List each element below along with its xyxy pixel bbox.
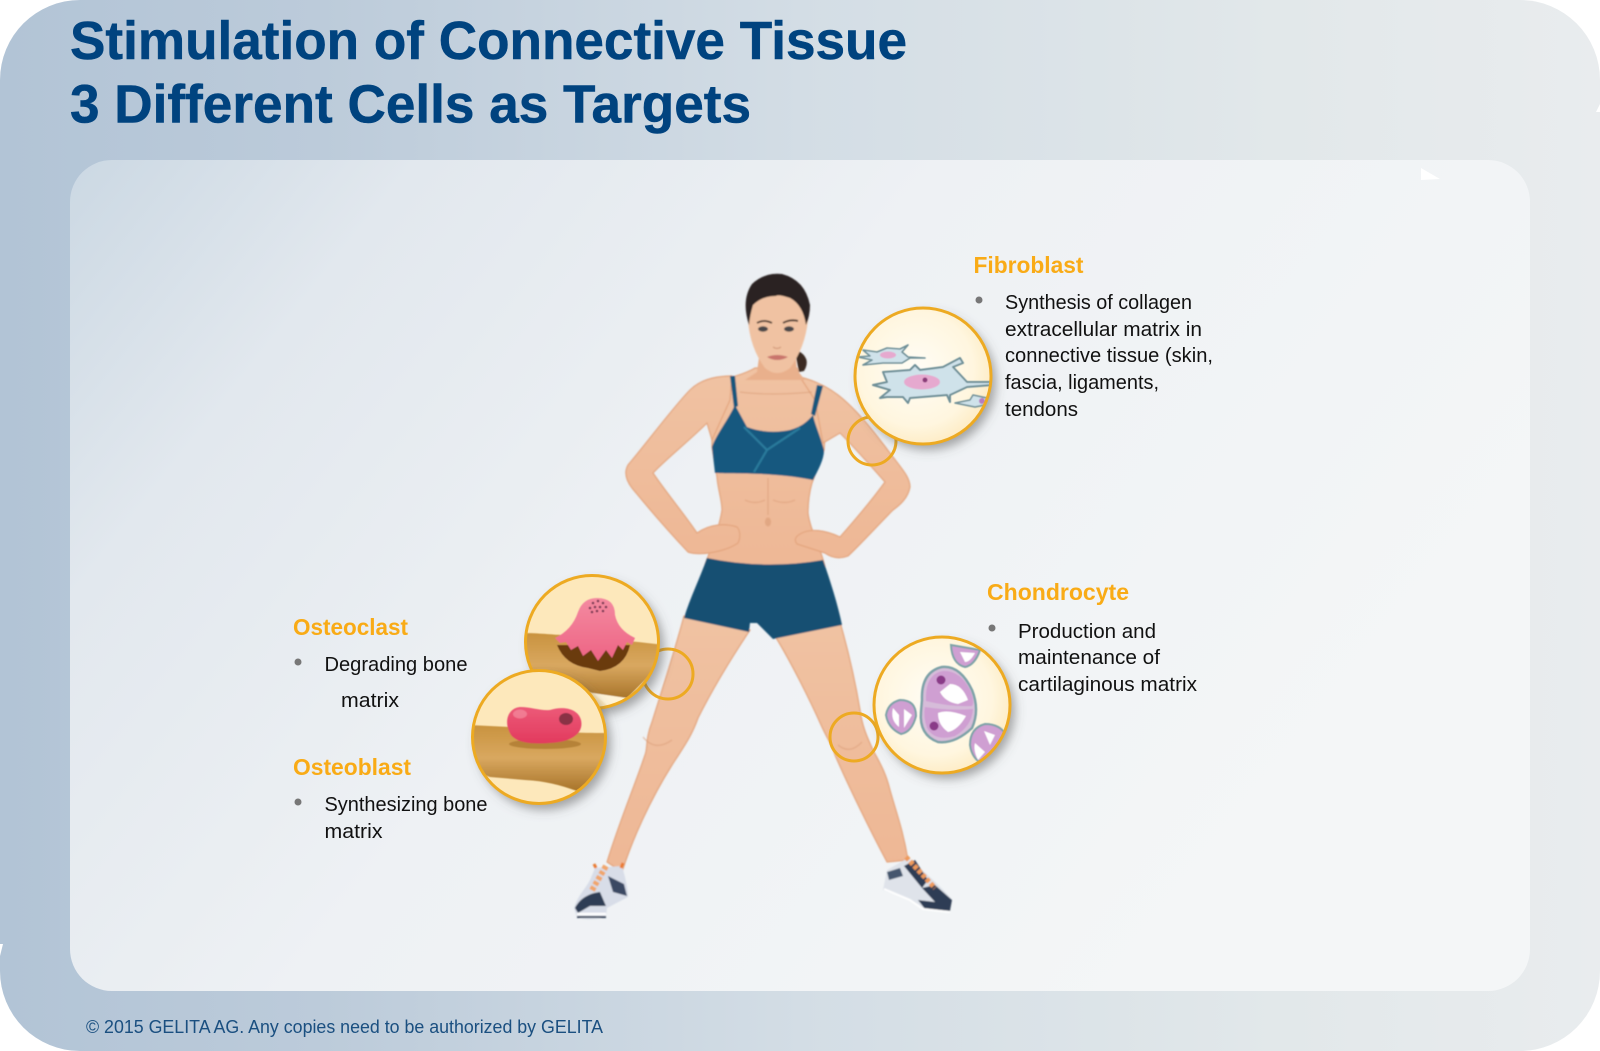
- body shading: [643, 392, 862, 749]
- text: osteoclast: matrix: [341, 690, 399, 712]
- title: 3 Different Cells as Targets: [70, 74, 751, 134]
- text: osteoclast: Osteoclast: [293, 614, 408, 640]
- legs: [607, 616, 908, 872]
- title: [70, 11, 907, 134]
- text: chondrocyte: maintenance of: [1018, 647, 1160, 669]
- text: fibroblast: Fibroblast: [974, 252, 1084, 278]
- left shoe: [574, 863, 628, 919]
- circle: chondrocyte: [874, 637, 1010, 773]
- text: chondrocyte: Production and: [1018, 621, 1156, 643]
- footer copyright: © 2015 GELITA AG. Any copies need to be authorized by GELITA: [86, 1017, 603, 1037]
- text: chondrocyte: Chondrocyte: [987, 579, 1129, 605]
- text: osteoblast: matrix: [324, 821, 382, 843]
- text: osteoblast: [293, 754, 488, 843]
- sports bra: [712, 376, 824, 480]
- figure: woman in sportswear: [574, 274, 952, 919]
- locator rings on body: [643, 417, 896, 761]
- torso and arms: [626, 368, 910, 567]
- text: fibroblast: fascia, ligaments,: [1005, 372, 1159, 394]
- title: Stimulation of Connective Tissue: [70, 11, 907, 71]
- text: fibroblast: connective tissue (skin,: [1005, 345, 1213, 367]
- text: osteoclast: [293, 614, 468, 712]
- circle: fibroblast: [855, 308, 992, 444]
- text: fibroblast: tendons: [1005, 399, 1078, 421]
- neck and head: [745, 350, 805, 380]
- text: osteoblast: Osteoblast: [293, 754, 411, 780]
- text: chondrocyte: cartilaginous matrix: [1018, 674, 1197, 696]
- text: osteoblast: Synthesizing bone: [324, 794, 488, 816]
- text: fibroblast: Synthesis of collagen: [1005, 292, 1192, 314]
- text: chondrocyte: [987, 579, 1197, 696]
- right shoe: [883, 857, 952, 912]
- text: osteoclast: Degrading bone: [324, 654, 468, 676]
- text: fibroblast: extracellular matrix in: [1005, 319, 1202, 341]
- circle: osteoclast: [515, 575, 665, 709]
- text: fibroblast: [974, 252, 1213, 421]
- circle: osteoblast: [470, 670, 610, 804]
- shorts: [684, 558, 842, 639]
- content panel: [70, 160, 1530, 991]
